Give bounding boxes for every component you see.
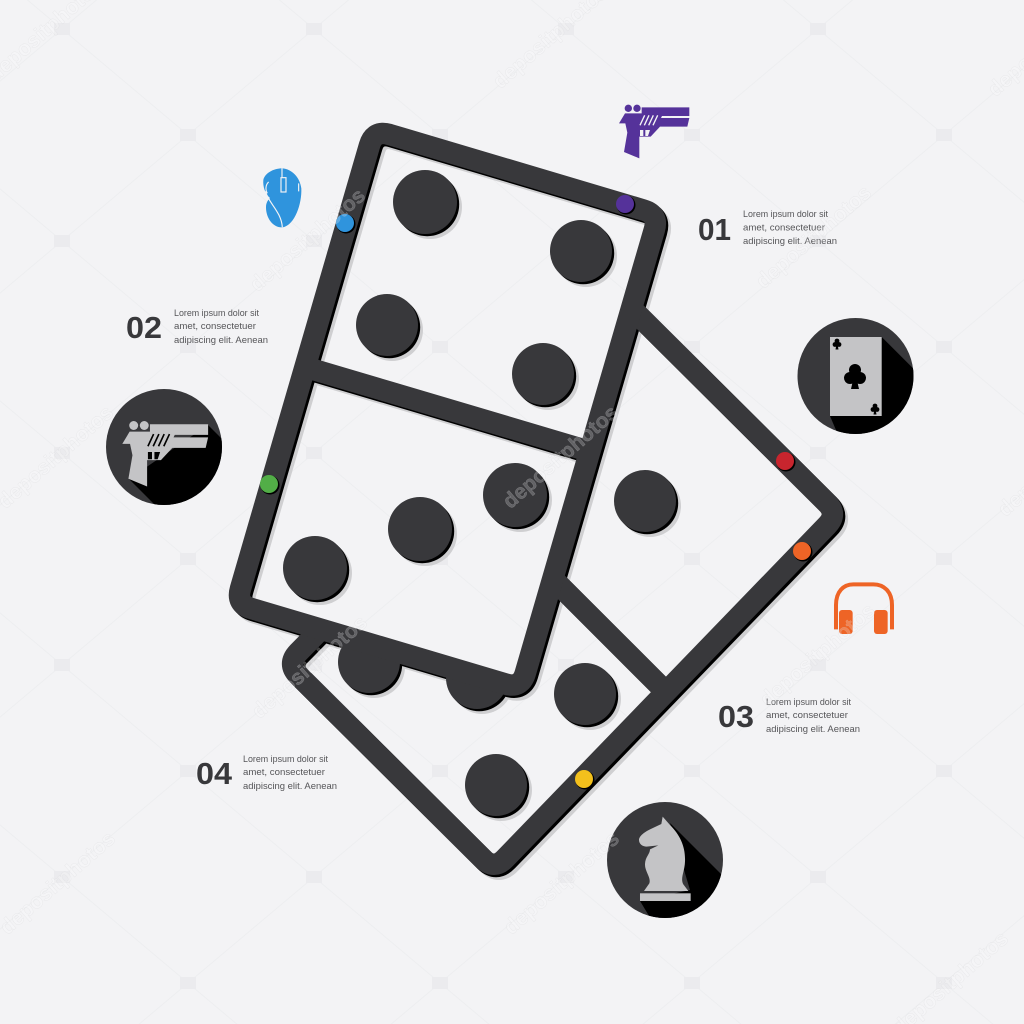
step 04 — [196, 754, 337, 792]
icon circle: pistol — [106, 389, 222, 505]
step 02: 02 — [126, 310, 162, 345]
step 03: Lorem ipsum dolor sit — [766, 697, 851, 708]
step 03: 03 — [718, 699, 754, 734]
icon circle: playing card — [798, 318, 914, 434]
watermark text: depositphotos — [756, 599, 880, 711]
watermark text: depositphotos — [500, 827, 624, 939]
step 02 — [126, 308, 268, 346]
domino pair: back and front tiles with layered shadows — [239, 133, 837, 869]
icon circle: chess knight — [607, 802, 723, 918]
step 02: adipiscing elit. Aenean — [174, 335, 268, 346]
club symbols on card — [833, 339, 879, 414]
step 01 — [698, 209, 837, 247]
watermark text: depositphotos — [248, 611, 372, 723]
step 03: adipiscing elit. Aenean — [766, 724, 860, 735]
step 04: amet, consectetuer — [243, 767, 325, 778]
step 02: Lorem ipsum dolor sit — [174, 308, 259, 319]
step 01: adipiscing elit. Aenean — [743, 236, 837, 247]
icon: purple pistol — [619, 105, 689, 158]
icon: orange headphones — [836, 584, 892, 634]
step 04: 04 — [196, 756, 233, 791]
step 01: amet, consectetuer — [743, 222, 825, 234]
step 02: amet, consectetuer — [174, 321, 256, 332]
step 01: Lorem ipsum dolor sit — [743, 209, 828, 220]
icon: blue computer mouse — [263, 168, 301, 227]
watermark text: depositphotos — [499, 401, 623, 513]
step 01: 01 — [698, 212, 731, 247]
step 04: Lorem ipsum dolor sit — [243, 754, 328, 765]
step 03 — [718, 697, 860, 735]
watermark text: depositphotos — [246, 184, 370, 296]
watermark text: depositphotos — [752, 181, 876, 293]
step 04: adipiscing elit. Aenean — [243, 781, 337, 792]
colored pins on the domino outline — [260, 195, 812, 790]
step 03: amet, consectetuer — [766, 710, 848, 721]
